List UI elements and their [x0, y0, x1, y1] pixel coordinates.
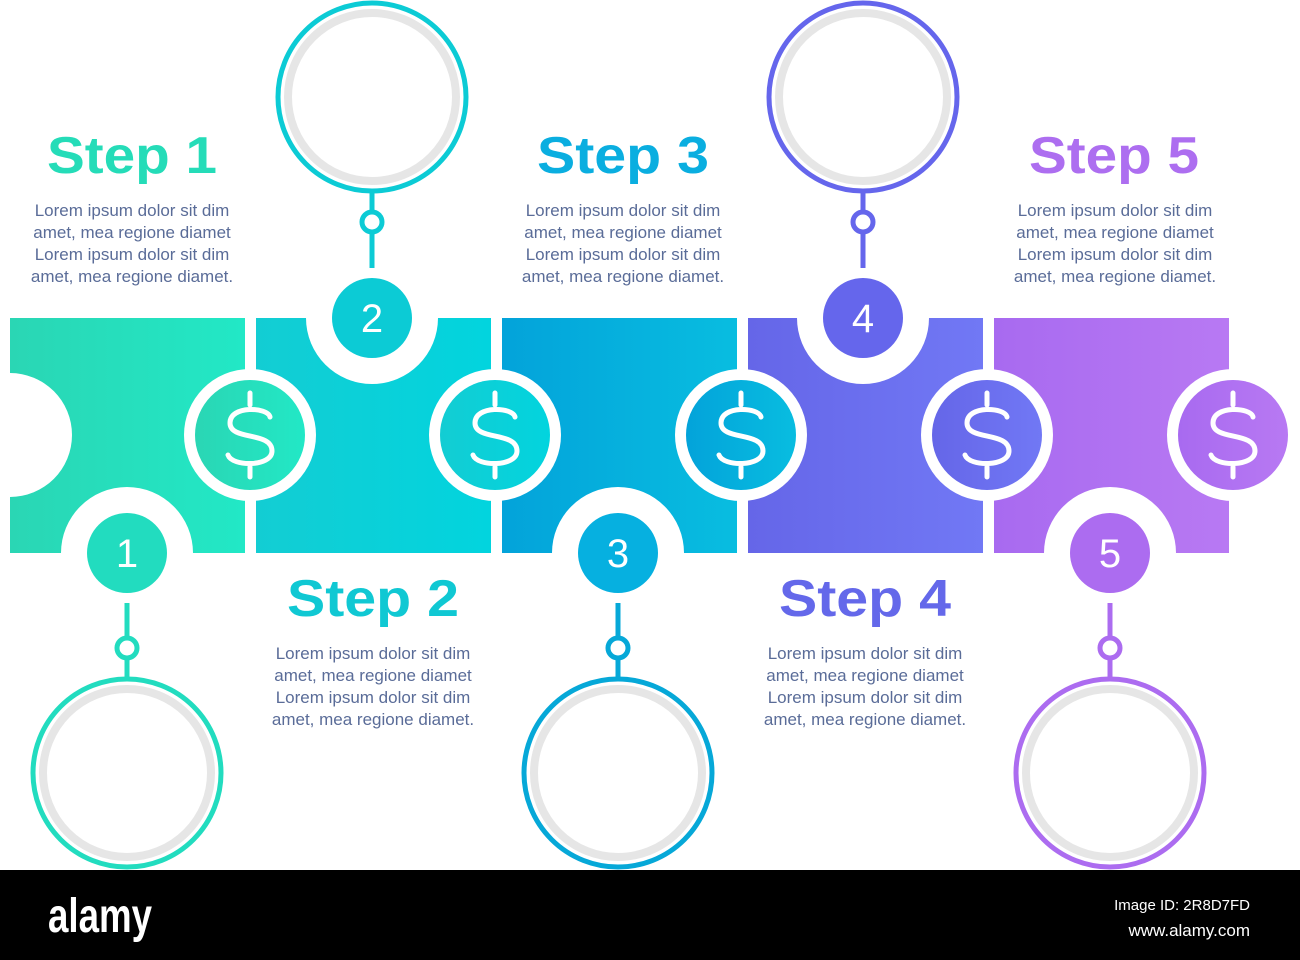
step headings: Step 5	[1029, 127, 1199, 185]
body texts	[31, 201, 1216, 729]
number badges: 1	[116, 532, 138, 576]
footer bar: www.alamy.com	[1127, 921, 1250, 940]
body texts: amet, mea regione diamet	[524, 223, 722, 242]
body texts: amet, mea regione diamet	[1016, 223, 1214, 242]
body texts: Lorem ipsum dolor sit dim	[35, 201, 229, 220]
number badges: 4	[852, 297, 874, 341]
body texts: Lorem ipsum dolor sit dim	[1018, 245, 1212, 264]
number badges: 2	[361, 297, 383, 341]
step headings	[47, 127, 1199, 628]
body texts: Lorem ipsum dolor sit dim	[768, 644, 962, 663]
footer bar	[0, 870, 1300, 960]
body texts: Lorem ipsum dolor sit dim	[526, 201, 720, 220]
body texts: amet, mea regione diamet	[33, 223, 231, 242]
body texts: amet, mea regione diamet.	[522, 267, 724, 286]
footer bar: alamy	[48, 890, 152, 943]
footer bar: Image ID: 2R8D7FD	[1114, 897, 1250, 914]
step headings: Step 1	[47, 127, 217, 185]
body texts: Lorem ipsum dolor sit dim	[768, 688, 962, 707]
body texts: Lorem ipsum dolor sit dim	[526, 245, 720, 264]
body texts: amet, mea regione diamet	[766, 666, 964, 685]
number badges: 5	[1099, 532, 1121, 576]
puzzle pieces	[0, 252, 1229, 619]
step headings: Step 3	[537, 127, 709, 185]
body texts: amet, mea regione diamet.	[764, 710, 966, 729]
number badges	[87, 278, 1150, 593]
body texts: Lorem ipsum dolor sit dim	[276, 644, 470, 663]
dollar icons	[184, 369, 1299, 501]
body texts: amet, mea regione diamet.	[31, 267, 233, 286]
body texts: amet, mea regione diamet.	[272, 710, 474, 729]
body texts: amet, mea regione diamet	[274, 666, 472, 685]
step headings: Step 2	[287, 570, 459, 628]
body texts: Lorem ipsum dolor sit dim	[1018, 201, 1212, 220]
body texts: Lorem ipsum dolor sit dim	[35, 245, 229, 264]
body texts: amet, mea regione diamet.	[1014, 267, 1216, 286]
body texts: Lorem ipsum dolor sit dim	[276, 688, 470, 707]
number badges: 3	[607, 532, 629, 576]
step headings: Step 4	[779, 570, 951, 628]
